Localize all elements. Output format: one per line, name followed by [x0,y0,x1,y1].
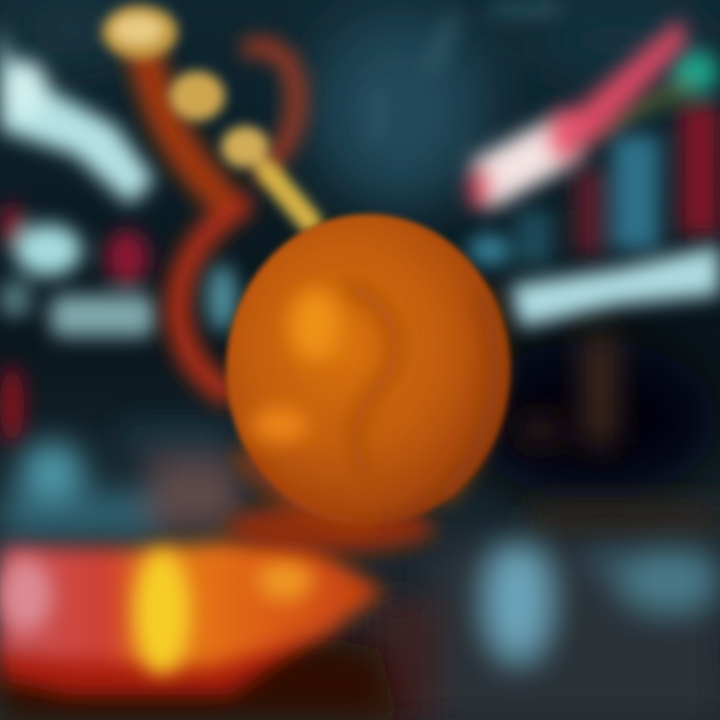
orange platform [0,535,385,695]
teal gap behind coin [206,264,238,332]
right white-teal ledge [468,234,720,328]
gold beads and stem [102,5,310,222]
coin glints [240,285,495,522]
backdrop glow: upper centre [0,0,720,500]
red ribbon behind coin [145,47,297,392]
platform red underside [0,620,340,695]
platform highlights [0,550,313,674]
floor reflections left [0,425,240,540]
coin body [226,214,510,526]
platform surface [0,535,385,668]
left market blobs [0,203,155,445]
right market: candles and columns [515,50,720,265]
bottom right reflections [370,540,720,720]
bottom dark base [0,640,400,720]
right pink and white streak [468,18,688,210]
left white-teal arrow streak [0,25,155,205]
backdrop streaks: upper centre [375,8,560,140]
coin [225,214,510,554]
coin shadow base [225,502,435,554]
right lower dark area with brown glints [518,335,720,535]
